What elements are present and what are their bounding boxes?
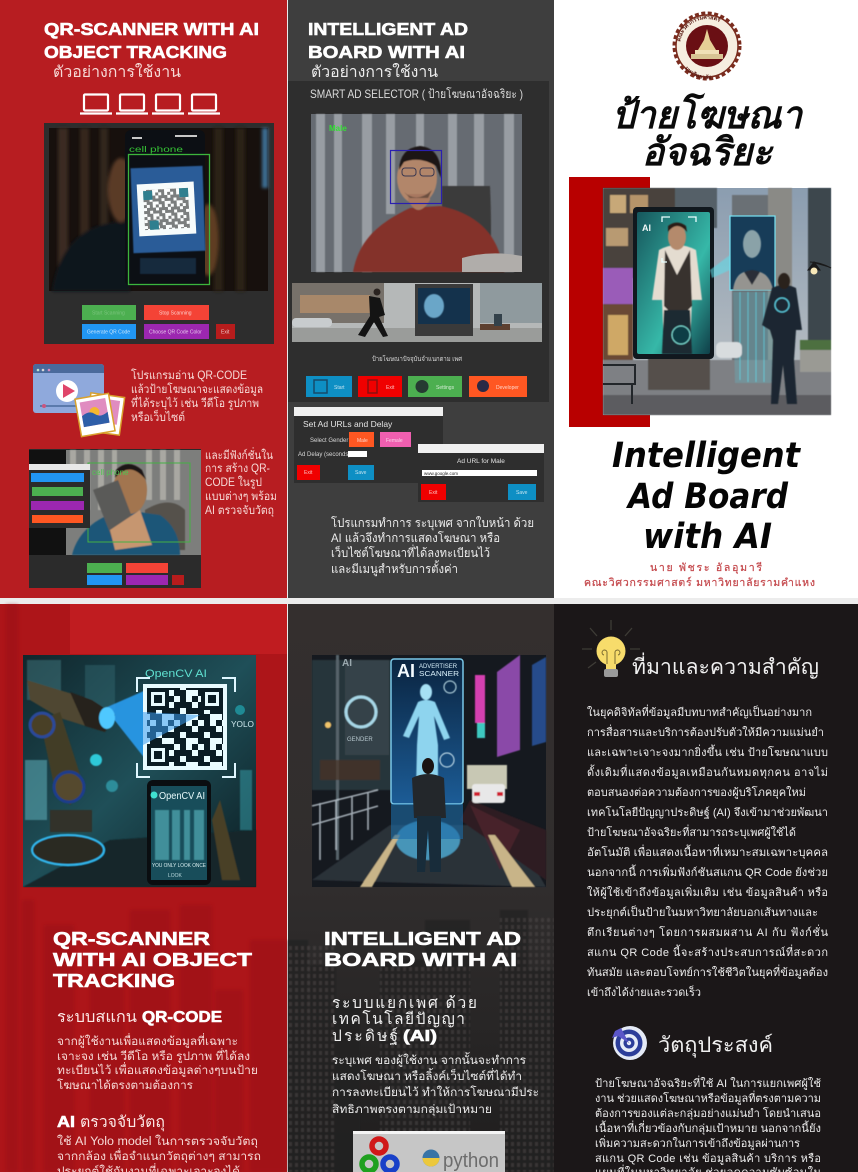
title: Thai: ป้ายโฆษณา: [612, 92, 804, 137]
dialog: set ad URLs and delay: Select Gender: [310, 438, 348, 444]
image: AI advertiser scanner at night: AI: [397, 661, 415, 681]
image: robot scanning QR code: YOU ONLY LOOK ONCE: [152, 863, 207, 869]
dialog: ad URL for male: Exit: [429, 490, 438, 496]
section: AI object detection: ใช้ AI Yolo model ในการตรวจจับวัตถุ: [57, 1135, 258, 1148]
heading: QR scanner with AI object tracking: [53, 928, 253, 991]
subheading: gender classification with AI: เทคโนโลยีปัญญา: [332, 1010, 465, 1028]
text: gender classification description: [332, 1052, 539, 1116]
author and faculty: คณะวิศวกรรมศาสตร์ มหาวิทยาลัยรามคำแหง: [584, 576, 815, 589]
text: QR generation description: CODE ในรูป: [205, 476, 262, 489]
text: background paragraph: ตอบสนองต่อความต้องการของผู้บริโภคยุคใหม่: [587, 785, 806, 799]
heading: objectives: วัตถุประสงค์: [658, 1033, 773, 1058]
text: QR code description: แล้วป้ายโฆษณาจะแสดงข้อมูล: [131, 382, 263, 396]
dialog: ad URL for male: www.google.com: [424, 471, 458, 476]
heading: QR scanner with AI object tracking: TRACKING: [53, 970, 175, 991]
author and faculty: [584, 561, 815, 589]
heading: QR scanner with AI object tracking: OBJECT TRACKING: [44, 42, 227, 62]
text: QR code description: [131, 368, 263, 424]
logos: OpenCV and Python: [353, 1131, 505, 1172]
webcam view with detected face: [311, 114, 522, 272]
app buttons: Developer: [496, 385, 519, 391]
app buttons: Exit: [386, 385, 395, 391]
dialog: ad URL for male: Ad URL for Male: [457, 458, 505, 465]
app buttons: [87, 563, 184, 585]
text: background paragraph: สแกน QR Code นี้จะสร้างประสบการณ์ที่สะดวก: [587, 944, 828, 959]
app buttons: Settings: [436, 385, 455, 391]
section: QR code scanning system: โฆษณาได้ตรงตามต้องการ: [57, 1078, 193, 1092]
dialog: set ad URLs and delay: [294, 407, 443, 483]
text: objectives paragraph: เพิ่มความสะดวกในการเข้าถึงข้อมูลผ่านการ: [595, 1135, 800, 1150]
text: QR generation description: แบบต่างๆ พร้อม: [205, 490, 277, 503]
title: English: Ad Board: [625, 477, 789, 517]
icon: row of four laptops: [80, 94, 220, 114]
section: QR code scanning system: เจาะจง เช่น วีดีโอ หรือ รูปภาพ ที่ได้ลง: [57, 1048, 250, 1063]
app buttons: Stop Scanning: [159, 310, 192, 316]
text: objectives paragraph: ต้องการของแต่ละกลุ่มอย่างแม่นยำ โดยนำเสนอ: [595, 1106, 821, 1120]
image: robot scanning QR code: LOOK: [168, 873, 183, 879]
background: grey city skyline: [288, 910, 554, 1172]
section: AI object detection: AI: [57, 1114, 75, 1131]
webcam view: cell phone: [92, 468, 129, 477]
image: AI advertiser scanner at night: SCANNER: [419, 671, 459, 678]
text: QR generation description: การ สร้าง QR-: [205, 462, 270, 475]
screenshot: smart ad selector app: [288, 81, 549, 402]
text: background paragraph: เทคโนโลยีปัญญาประดิษฐ์ (AI) จึงเข้ามาช่วยพัฒนา: [587, 805, 828, 819]
author and faculty: นาย พัชระ อัลอุมารี: [650, 561, 762, 574]
text: objectives paragraph: เนื้อหาที่เกี่ยวข้องกับกลุ่มเป้าหมาย นอกจากนี้ยัง: [595, 1120, 821, 1135]
panel: background and objectives: [554, 604, 858, 1172]
icon: university faculty seal: คณะวิศวกรรมศาสตร์: [678, 16, 722, 42]
app buttons: Start: [334, 385, 345, 391]
dialog: ad URL for male: [418, 444, 544, 502]
heading: QR scanner with AI object tracking: QR-SCANNER WITH AI: [44, 19, 259, 39]
app buttons: [82, 305, 235, 339]
text: objectives paragraph: งาน ช่วยแสดงโฆษณาหรือข้อมูลที่ตรงตามความ: [595, 1090, 821, 1105]
text: background paragraph: ดั้งเดิมที่แสดงข้อมูลเหมือนกันหมดทุกคน อาจไม่: [587, 764, 828, 779]
title: English: [612, 436, 801, 557]
text: background paragraph: ตึกเรียนต่างๆ โดยการผสมผสาน AI กับ ฟังก์ชั่น: [587, 924, 828, 939]
text: background paragraph: [587, 704, 828, 999]
dialog: set ad URLs and delay: Ad Delay (seconds): [298, 452, 350, 458]
text: gender classification description: การลงทะเบียนไว้ ทำให้การโฆษณามีประ: [332, 1085, 539, 1099]
dialog: set ad URLs and delay: Exit: [304, 470, 313, 476]
heading: QR scanner with AI object tracking: [44, 19, 259, 62]
background: red city texture: [6, 604, 287, 1172]
text: QR code description: ที่ได้ระบุไว้ เช่น วีดีโอ รูปภาพ: [131, 395, 259, 410]
heading: intelligent ad board with AI: [308, 19, 468, 62]
section: QR code scanning system: ระบบสแกน: [57, 1009, 137, 1026]
text: QR generation description: [205, 447, 277, 517]
dialog: ad URL for male: Save: [516, 490, 528, 496]
heading: background and significance: ที่มาและความสำคัญ: [632, 652, 819, 679]
icon: university faculty seal: มหาวิทยาลัย: [685, 66, 711, 80]
image: AI advertiser scanner at night: GENDER: [347, 737, 373, 743]
text: background paragraph: ทันสมัย และตอบโจทย์การใช้ชีวิตในยุคที่ข้อมูลต้อง: [587, 964, 828, 979]
text: background paragraph: การสื่อสารและบริการต้องปรับตัวให้มีความแม่นยำ: [587, 724, 824, 739]
text: program description: [331, 516, 534, 577]
panel: intelligent ad board usage example: [288, 0, 554, 598]
text: background paragraph: ในยุคดิจิทัลที่ข้อมูลมีบทบาทสำคัญเป็นอย่างมาก: [587, 704, 812, 719]
icon: university faculty seal: [672, 12, 742, 80]
webcam view: [29, 450, 201, 555]
screenshot: QR code generator with object detection: [29, 449, 201, 588]
dialog: set ad URLs and delay: Female: [386, 438, 403, 444]
subheading: gender classification with AI: ประดิษฐ์: [332, 1027, 398, 1045]
heading: intelligent ad board with AI: INTELLIGENT AD: [308, 19, 468, 39]
section: AI object detection: ตรวจจับวัตถุ: [80, 1114, 165, 1132]
title: English: with AI: [643, 517, 772, 557]
image: AI advertiser scanner at night: [312, 655, 546, 887]
text: QR generation description: และมีฟังก์ชั่นใน: [205, 447, 273, 462]
icon: target with arrow: [612, 1026, 647, 1060]
text: QR generation description: AI ตรวจจับวัตถุ: [205, 505, 274, 517]
image: AI advertiser scanner at night: AI: [342, 658, 352, 669]
image: robot scanning QR code: OpenCV AI: [159, 791, 205, 802]
section: QR code scanning system: จากผู้ใช้งานเพื่อแสดงข้อมูลที่เฉพาะ: [57, 1033, 238, 1048]
text: background paragraph: ประยุกต์เป็นป้ายในมหาวิทยาลัยบอกเส้นทางและ: [587, 905, 818, 919]
icon: video window and photos: [33, 364, 125, 437]
panel: QR scanner usage example: [0, 0, 287, 598]
title: English: Intelligent: [612, 436, 801, 476]
text: program description: เว็บไซต์โฆษณาที่ได้ลงทะเบียนไว้: [331, 544, 490, 560]
ad billboard street scene: [292, 283, 542, 342]
image: robot scanning QR code: [23, 655, 256, 887]
section: QR code scanning system: QR-CODE: [142, 1009, 222, 1026]
text: gender classification description: ระบุเพศ ของผู้ใช้งาน จากนั้นจะทำการ: [332, 1052, 526, 1067]
title: Thai: อัจฉริยะ: [642, 132, 775, 174]
app buttons: Generate QR Code: [87, 330, 130, 336]
subheading: usage example: ตัวอย่างการใช้งาน: [53, 63, 181, 81]
heading: intelligent ad board with AI: BOARD WITH AI: [324, 949, 517, 970]
subheading: gender classification with AI: (AI): [403, 1028, 437, 1045]
webcam view with phone showing QR code: [49, 128, 268, 291]
subheading: gender classification with AI: [332, 995, 477, 1045]
text: objectives paragraph: ป้ายโฆษณาอัจฉริยะที่ใช้ AI ในการแยกเพศผู้ใช้: [595, 1075, 821, 1090]
image: robot scanning QR code: OpenCV AI: [145, 668, 207, 680]
icon: light bulb: [582, 620, 640, 677]
app title: SMART AD SELECTOR ( ป้ายโฆษณาอัจฉริยะ ): [310, 87, 523, 101]
text: background paragraph: นอกจากนี้ การเพิ่มฟังก์ชันสแกน QR Code ยังช่วย: [587, 864, 828, 879]
hero image: AI billboard scanning a passer-by: AI: [642, 223, 651, 233]
dialog: set ad URLs and delay: Save: [355, 470, 367, 476]
panel: cover: [554, 0, 858, 598]
hero image: AI billboard scanning a passer-by: [603, 188, 831, 415]
text: objectives paragraph: [595, 1075, 821, 1172]
logos: OpenCV and Python: python: [443, 1150, 499, 1172]
text: objectives paragraph: สแกน QR Code เช่น ข้อมูลสินค้า บริการ หรือ: [595, 1152, 821, 1165]
text: QR code description: หรือเว็บไซต์: [131, 409, 185, 424]
screenshot: QR scanning app: [44, 123, 274, 344]
subheading: usage example: ตัวอย่างการใช้งาน: [311, 63, 438, 81]
panel: intelligent ad board overview: [288, 604, 554, 1172]
app buttons: Start Scanning: [92, 310, 125, 316]
subheading: gender classification with AI: ระบบแยกเพศ ด้วย: [332, 995, 477, 1012]
text: program description: AI แล้วจึงทำการแสดงโฆษณา หรือ: [331, 531, 500, 545]
text: QR code description: โปรแกรมอ่าน QR-CODE: [131, 368, 247, 382]
text: program description: โปรแกรมทำการ ระบุเพศ จากใบหน้า ด้วย: [331, 516, 534, 531]
app buttons: Choose QR Code Color: [149, 330, 202, 336]
heading: intelligent ad board with AI: INTELLIGENT AD: [324, 928, 521, 949]
heading: intelligent ad board with AI: BOARD WITH AI: [308, 42, 465, 62]
webcam view with detected face: Male: [329, 124, 347, 133]
text: gender classification description: แสดงโฆษณา หรือลิ้งค์เว็บไซต์ที่ได้ทำ: [332, 1068, 522, 1083]
image: AI advertiser scanner at night: ADVERTISER: [419, 664, 458, 670]
heading: QR scanner with AI object tracking: WITH AI OBJECT: [53, 949, 253, 970]
text: background paragraph: ป้ายโฆษณาอัจฉริยะที่สามารถระบุเพศผู้ใช้ได้: [587, 824, 796, 839]
dialog: set ad URLs and delay: Set Ad URLs and Delay: [303, 419, 393, 429]
app buttons: [306, 376, 527, 397]
section: QR code scanning system: ทะเบียนไว้ เพื่อแสดงข้อมูลต่างๆบนป้าย: [57, 1062, 258, 1077]
webcam view with phone showing QR code: cell phone: [129, 144, 183, 154]
dialog: set ad URLs and delay: Male: [357, 438, 368, 444]
caption: ป้ายโฆษณาปัจจุบันจำแนกตาม เพศ: [372, 355, 463, 363]
heading: QR scanner with AI object tracking: QR-SCANNER: [53, 928, 210, 949]
text: program description: และมีเมนูสำหรับการตั้งค่า: [331, 560, 458, 577]
text: background paragraph: และเฉพาะเจาะจงมากยิ่งขึ้น เช่น ป้ายโฆษณาแบบ: [587, 744, 828, 759]
section: AI object detection: [57, 1114, 261, 1172]
heading: intelligent ad board with AI: [324, 928, 521, 970]
section: QR code scanning system: [57, 1009, 258, 1092]
image: robot scanning QR code: YOLO: [231, 720, 254, 729]
decorative red block: [569, 177, 650, 427]
panel: QR scanner overview: [0, 604, 287, 1172]
section: AI object detection: จากกล้อง เพื่อจำแนกวัตถุต่างๆ สามารถ: [57, 1148, 261, 1163]
title: Thai: [612, 92, 804, 174]
text: background paragraph: เข้าถึงได้ง่ายและรวดเร็ว: [587, 985, 701, 999]
text: background paragraph: ให้ผู้ใช้เข้าถึงข้อมูลเพิ่มเติม เช่น ข้อมูลสินค้า หรือ: [587, 884, 828, 899]
app buttons: Exit: [221, 330, 230, 336]
text: gender classification description: สิทธิภาพตรงตามกลุ่มเป้าหมาย: [332, 1103, 492, 1116]
text: background paragraph: อัตโนมัติ เพื่อแสดงเนื้อหาที่เหมาะสมเฉพาะบุคคล: [587, 844, 828, 859]
